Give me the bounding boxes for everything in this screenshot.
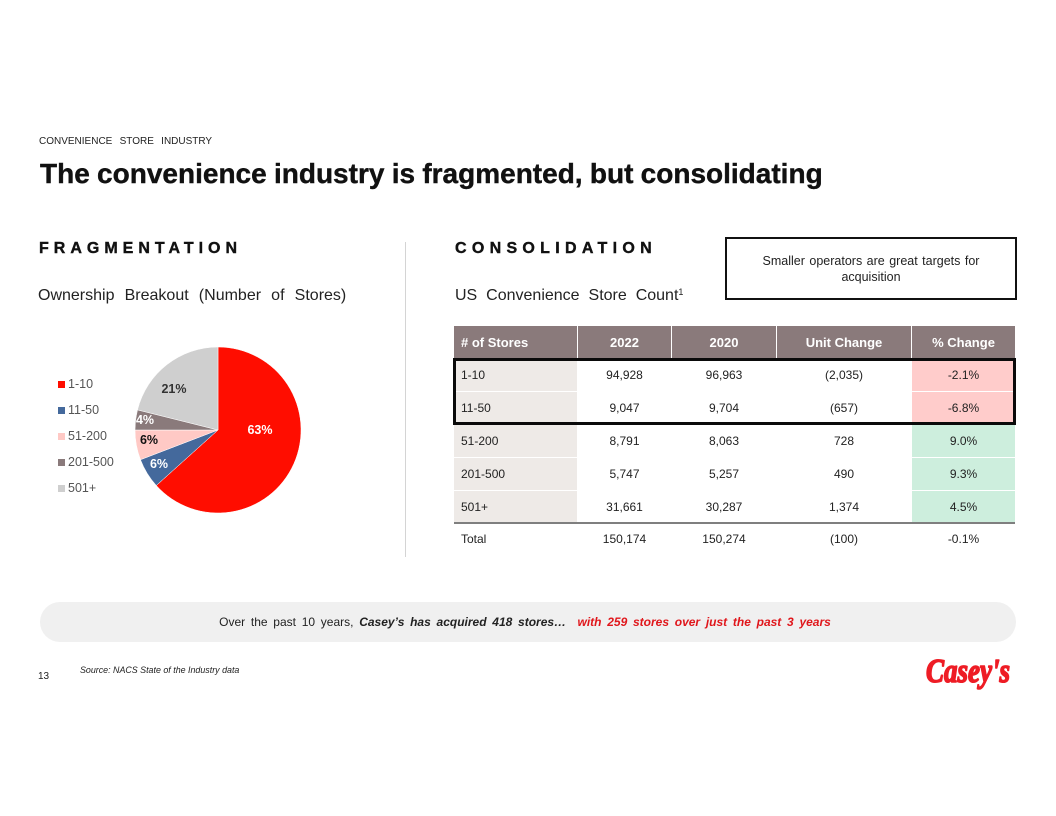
row: 1-10: (2,035) — [825, 368, 863, 382]
row: 11-50: 9,047 — [609, 401, 640, 415]
table header: 2022 — [610, 334, 639, 350]
store count table — [453, 326, 1016, 546]
row: 501+: 31,661 — [606, 500, 643, 514]
row: total: (100) — [830, 532, 858, 546]
table header: 2020 — [710, 334, 738, 350]
legend: 11-50 — [68, 403, 99, 417]
pie data labels: 6% — [140, 433, 158, 447]
pie slices — [135, 347, 301, 513]
takeaway banner — [40, 602, 1016, 642]
row: 1-10: 96,963 — [706, 368, 742, 382]
legend: 501+ — [68, 481, 96, 495]
pie data labels — [136, 382, 273, 471]
source note: Source: NACS State of the Industry data — [80, 665, 239, 675]
row: 1-10: 94,928 — [606, 368, 643, 382]
row: 201-500: 490 — [834, 467, 854, 481]
heading: consolidation: CONSOLIDATION — [455, 240, 657, 257]
table header: Unit Change — [806, 334, 882, 350]
legend: 1-10 — [68, 377, 93, 391]
legend: 201-500 — [68, 455, 114, 469]
row: 11-50: (657) — [830, 401, 858, 415]
callout: Smaller operators are great targets for acquisition — [763, 254, 979, 284]
row: 11-50: 11-50 — [461, 401, 491, 415]
legend: 51-200 — [68, 429, 107, 443]
row: total: Total — [461, 532, 486, 546]
row: 1-10 — [456, 361, 1013, 391]
legend — [58, 377, 114, 495]
row: 51-200: 9.0% — [950, 434, 977, 448]
row: 501+ — [454, 491, 1015, 522]
row: total — [461, 532, 979, 546]
row: 501+: 501+ — [461, 500, 488, 514]
pie chart with legend — [58, 347, 301, 513]
pie data labels: 21% — [161, 382, 187, 396]
section label: CONVENIENCE STORE INDUSTRY — [39, 136, 212, 147]
row: 51-200: 51-200 — [461, 434, 498, 448]
page number: 13 — [38, 671, 49, 682]
row: 51-200: 728 — [834, 434, 854, 448]
row: total: 150,274 — [702, 532, 746, 546]
table header: # of Stores — [461, 334, 528, 350]
row: 11-50 — [456, 392, 1013, 422]
row: 11-50: -6.8% — [948, 401, 979, 415]
row: 501+: 1,374 — [829, 500, 859, 514]
heading: fragmentation: FRAGMENTATION — [39, 240, 242, 257]
table header: % Change — [932, 334, 995, 350]
row: 201-500: 9.3% — [950, 467, 977, 481]
row: total: 150,174 — [603, 532, 646, 546]
row: 501+: 4.5% — [950, 500, 977, 514]
row: 11-50: 9,704 — [709, 401, 739, 415]
row: 51-200: 8,063 — [709, 434, 739, 448]
row: 201-500 — [454, 458, 1015, 490]
callout — [725, 237, 1017, 300]
pie data labels: 4% — [136, 413, 154, 427]
highlight box around small operators — [453, 358, 1016, 425]
title: The convenience industry is fragmented, but consolidating — [40, 158, 823, 189]
table subtitle: US Convenience Store Count1 — [455, 287, 683, 304]
row: 201-500: 5,257 — [709, 467, 739, 481]
row: 201-500: 201-500 — [461, 467, 505, 481]
row: total: -0.1% — [948, 532, 979, 546]
row: 201-500: 5,747 — [609, 467, 640, 481]
row: 501+: 30,287 — [706, 500, 742, 514]
pie data labels: 63% — [247, 423, 273, 437]
chart subtitle: Ownership Breakout (Number of Stores) — [38, 287, 346, 304]
pie data labels: 6% — [150, 457, 168, 471]
table header — [454, 326, 1015, 358]
row: 1-10: -2.1% — [948, 368, 979, 382]
row: 1-10: 1-10 — [461, 368, 485, 382]
row: 51-200 — [454, 425, 1015, 457]
row: 51-200: 8,791 — [609, 434, 640, 448]
takeaway banner: Over the past 10 years, Casey’s has acquired 418 stores… with 259 stores over just the past 3 years — [219, 615, 831, 629]
